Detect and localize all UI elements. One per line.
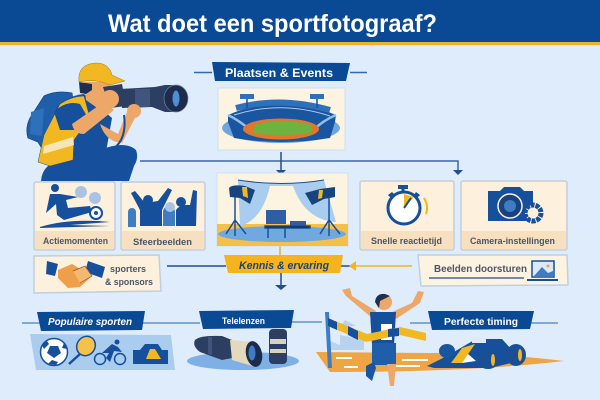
card: Camera-instellingen: [461, 181, 567, 250]
safety vest: [38, 96, 90, 166]
head: [84, 82, 112, 110]
icon: football: [40, 338, 68, 366]
track: [316, 352, 564, 372]
icon: handshake: [46, 261, 105, 288]
legs: [41, 145, 137, 181]
heading: Kennis & ervaring: [224, 255, 343, 273]
label: Camera-instellingen: [470, 236, 555, 246]
finish tape: [328, 318, 426, 342]
title: Wat doet een sportfotograaf?: [108, 10, 437, 38]
left lamp: [229, 185, 255, 204]
stands: [226, 195, 340, 236]
hand: [101, 90, 119, 108]
arm: [72, 102, 114, 134]
telephoto lens: [120, 85, 178, 112]
card: sporters & sponsors: [34, 255, 161, 293]
icon: cyclist: [94, 340, 126, 364]
heading: Plaatsen & Events: Plaatsen & Events: [225, 68, 333, 80]
icon: race car: [133, 344, 168, 364]
heading: Perfecte timing: Perfecte timing: [444, 316, 518, 328]
heading: Populaire sporten: [37, 311, 145, 331]
camera body: [103, 84, 126, 108]
heading: Perfecte timing: [428, 311, 534, 330]
torso: [56, 94, 112, 166]
illustration: finish line with runner and race car: [316, 288, 564, 386]
icon: laptop: [527, 261, 558, 281]
icon: telephoto lens and lens barrel: [187, 329, 299, 370]
heading: Telelenzen: Telelenzen: [222, 316, 265, 327]
icon: stopwatch: [388, 185, 427, 224]
icon: camera with gear: [488, 187, 541, 221]
label: Beelden doorsturen: [434, 263, 527, 275]
card: Snelle reactietijd: [360, 181, 454, 250]
label: sporters: [110, 264, 146, 274]
photographer illustration: [27, 63, 188, 181]
finish post: [325, 312, 332, 368]
card: Actiemomenten: [34, 182, 115, 250]
label: Snelle reactietijd: [371, 236, 442, 246]
connector lines: [22, 72, 558, 323]
icon: stadium: [222, 94, 340, 143]
panel: sports icons: [30, 333, 175, 370]
icon: crowd: [128, 188, 197, 227]
label: Sfeerbeelden: [133, 237, 192, 248]
panel: studio lighting: [217, 173, 348, 246]
heading: Kennis & ervaring: Kennis & ervaring: [239, 260, 329, 272]
header banner: [0, 0, 600, 45]
backpack: [27, 92, 80, 152]
right lamp: [305, 187, 335, 205]
monitor desk: [266, 210, 306, 226]
cap: [79, 63, 125, 85]
panel: stadium: [218, 88, 345, 150]
underline: [429, 277, 524, 279]
heading: Telelenzen: [199, 310, 294, 329]
runner: [342, 288, 424, 386]
card: Beelden doorsturen: [418, 255, 568, 286]
label: Actiemomenten: [43, 236, 108, 246]
card: sporters & sponsors: & sponsors: [105, 277, 153, 287]
icon: tennis racket: [69, 333, 99, 364]
card: Sfeerbeelden: [121, 182, 205, 250]
heading: Plaatsen & Events: [212, 62, 350, 81]
stage: [217, 224, 348, 246]
race car: [427, 338, 526, 369]
arrowheads: [275, 170, 463, 290]
heading: Populaire sporten: Populaire sporten: [48, 316, 132, 328]
icon: footballer: [40, 184, 110, 228]
stands: [330, 320, 364, 350]
curtains: [238, 180, 336, 226]
strap: [90, 115, 125, 153]
